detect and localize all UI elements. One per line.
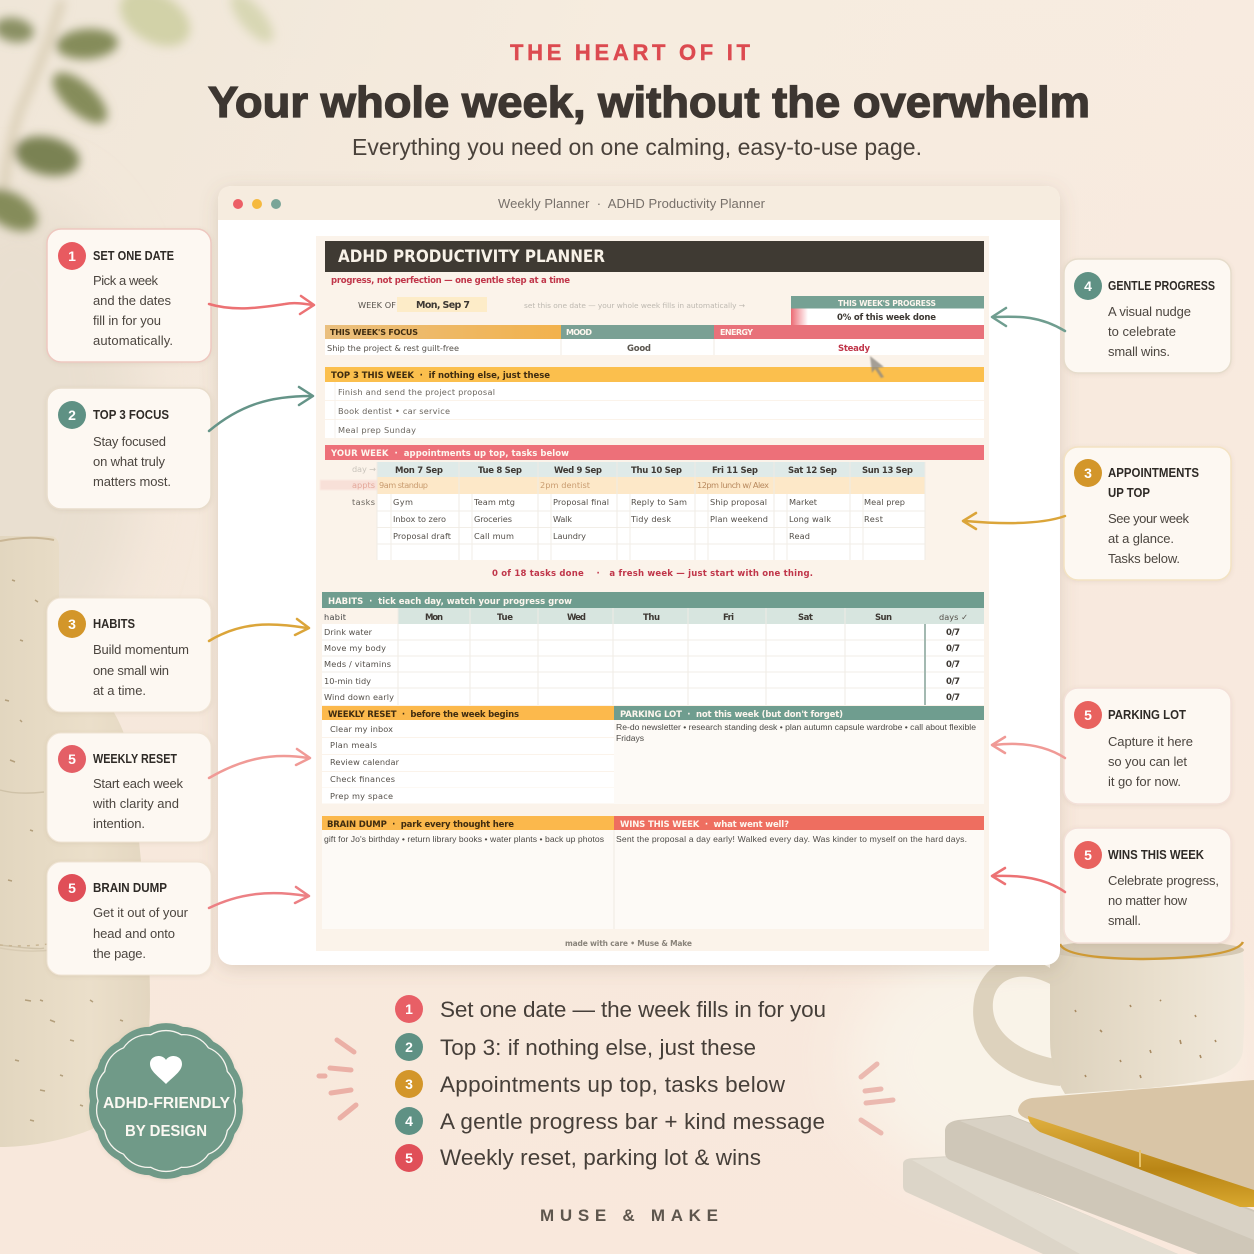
arrow: weekly reset xyxy=(209,749,310,778)
focus mood energy: MOOD xyxy=(566,328,592,337)
week grid: Sat 12 Sep xyxy=(788,466,837,476)
main title: Your whole week, without the overwhelm xyxy=(208,78,1090,127)
callout: top 3 focus: matters most. xyxy=(93,474,171,489)
callout: parking lot: PARKING LOT xyxy=(1108,708,1186,722)
your week xyxy=(320,445,984,579)
callout: appointments up top: Tasks below. xyxy=(1108,551,1180,566)
weekly reset: Clear my inbox xyxy=(330,724,393,734)
habits tracker: HABITS · tick each day, watch your progress grow xyxy=(328,597,572,607)
week grid xyxy=(320,462,925,560)
brain dump xyxy=(322,816,614,929)
week grid: Ship proposal xyxy=(710,497,767,507)
habits tracker xyxy=(322,592,984,705)
callout: weekly reset: WEEKLY RESET xyxy=(93,752,177,766)
callout: set one date: and the dates xyxy=(93,293,172,308)
week of date xyxy=(358,297,745,312)
badge: ADHD-friendly by design: BY DESIGN xyxy=(125,1123,207,1140)
brain dump: BRAIN DUMP · park every thought here xyxy=(327,820,514,830)
callout: brain dump: BRAIN DUMP xyxy=(93,881,167,895)
blurred plant shadow xyxy=(0,0,280,240)
callout: weekly reset: with clarity and xyxy=(92,796,179,811)
week grid: Meal prep xyxy=(864,497,905,507)
habits tracker: Move my body xyxy=(324,643,386,653)
arrow: top 3 focus xyxy=(209,387,313,431)
focus mood energy: Steady xyxy=(838,344,870,354)
habits tracker: Sun xyxy=(875,613,892,623)
callout: appointments up top: UP TOP xyxy=(1108,486,1150,500)
callout: wins this week: WINS THIS WEEK xyxy=(1108,848,1204,862)
window title bar: Weekly Planner · ADHD Productivity Planner xyxy=(498,196,766,211)
callout: habits xyxy=(47,598,211,712)
week grid: Fri 11 Sep xyxy=(712,466,758,476)
wins this week xyxy=(614,816,984,929)
week grid: Gym xyxy=(393,497,413,507)
habits tracker: Meds / vitamins xyxy=(324,659,391,669)
callout: set one date: fill in for you xyxy=(93,313,161,328)
callout: appointments up top: at a glance. xyxy=(1108,531,1174,546)
habits tracker: 0/7 xyxy=(946,660,960,670)
callout: wins this week: small. xyxy=(1108,913,1141,928)
summary list xyxy=(395,995,826,1172)
icon: cursor xyxy=(870,356,884,378)
callout: parking lot: Capture it here xyxy=(1108,734,1193,749)
wins this week: Sent the proposal a day early! Walked every day. Was kinder to myself on the hard days. xyxy=(616,834,967,844)
callout: top 3 focus: on what truly xyxy=(93,454,166,469)
progress box xyxy=(791,296,984,325)
planner title xyxy=(325,241,984,272)
week grid: 2pm dentist xyxy=(540,480,591,490)
week grid: Long walk xyxy=(789,514,831,524)
callout: appointments up top: See your week xyxy=(1108,511,1190,526)
callout: top 3 focus xyxy=(47,388,211,509)
arrow: parking lot xyxy=(992,737,1065,758)
week grid: 12pm lunch w/ Alex xyxy=(697,480,769,490)
week of date: WEEK OF xyxy=(358,300,396,310)
parking lot: PARKING LOT · not this week (but don't forget) xyxy=(620,710,843,720)
wins this week: WINS THIS WEEK · what went well? xyxy=(620,820,789,830)
callout: habits: HABITS xyxy=(93,617,135,631)
habits tracker: Fri xyxy=(723,613,734,623)
summary list: Appointments up top, tasks below xyxy=(440,1072,786,1097)
callout: set one date xyxy=(47,229,211,362)
week grid: Team mtg xyxy=(473,497,515,507)
habits tracker: 0/7 xyxy=(946,677,960,687)
summary list: Set one date — the week fills in for you xyxy=(440,997,826,1022)
callout: brain dump: the page. xyxy=(93,946,146,961)
callout: weekly reset: intention. xyxy=(93,816,145,831)
summary list: Top 3: if nothing else, just these xyxy=(440,1035,756,1060)
top 3 this week: TOP 3 THIS WEEK · if nothing else, just these xyxy=(331,371,550,381)
callout: appointments up top: APPOINTMENTS xyxy=(1108,466,1199,480)
ceramic vase xyxy=(0,536,150,1147)
top 3 this week: Book dentist • car service xyxy=(338,406,450,416)
arrow: appointments xyxy=(963,513,1065,529)
week grid: Inbox to zero xyxy=(393,514,446,524)
your week: 0 of 18 tasks done · a fresh week — just start with one thing. xyxy=(492,569,813,579)
week grid: 9am standup xyxy=(379,480,428,490)
callout: wins this week: no matter how xyxy=(1108,893,1188,908)
weekly reset: WEEKLY RESET · before the week begins xyxy=(328,710,519,720)
callout: gentle progress: GENTLE PROGRESS xyxy=(1108,279,1215,293)
progress box: THIS WEEK'S PROGRESS xyxy=(838,299,936,308)
window title bar xyxy=(218,186,1060,220)
summary list: 4 xyxy=(405,1113,413,1129)
week grid: Read xyxy=(789,531,810,541)
callout: gentle progress: 4 xyxy=(1084,278,1092,294)
sheet footer: made with care • Muse & Make xyxy=(565,939,692,948)
callout: top 3 focus: TOP 3 FOCUS xyxy=(93,408,169,422)
week grid: Market xyxy=(789,497,818,507)
callout: top 3 focus: Stay focused xyxy=(93,434,166,449)
habits tracker: Wed xyxy=(567,613,586,623)
week grid: Laundry xyxy=(553,531,586,541)
habits tracker: Tue xyxy=(497,613,513,623)
habits tracker: Thu xyxy=(643,613,660,623)
habits tracker: 10-min tidy xyxy=(324,676,371,686)
parking lot: Re-do newsletter • research standing desk • plan autumn capsule wardrobe • call about flexible xyxy=(616,722,976,732)
focus mood energy: THIS WEEK'S FOCUS xyxy=(330,328,418,337)
week grid: Rest xyxy=(864,514,884,524)
callout: set one date: SET ONE DATE xyxy=(93,249,174,263)
habits tracker: Sat xyxy=(798,613,813,623)
eyebrow heading: THE HEART OF IT xyxy=(510,40,751,65)
callout: set one date: 1 xyxy=(68,248,76,264)
badge: ADHD-friendly by design xyxy=(89,1023,243,1179)
week grid: Tue 8 Sep xyxy=(478,466,522,476)
habits tracker: Mon xyxy=(425,613,443,623)
callout: brain dump: Get it out of your xyxy=(93,905,189,920)
weekly reset: Check finances xyxy=(330,774,395,784)
coffee mug xyxy=(973,940,1244,1094)
top 3 this week xyxy=(325,367,984,438)
summary list: 1 xyxy=(405,1001,413,1017)
habits tracker: 0/7 xyxy=(946,628,960,638)
arrow: set one date xyxy=(209,296,314,314)
habits tracker: 0/7 xyxy=(946,644,960,654)
week grid: Call mum xyxy=(474,531,514,541)
callout: set one date: Pick a week xyxy=(93,273,158,288)
icon: heart xyxy=(150,1056,182,1084)
habits tracker: days ✓ xyxy=(939,612,968,622)
week of date: set this one date — your whole week fills in automatically → xyxy=(524,301,745,310)
callout: habits: one small win xyxy=(93,663,169,678)
habits tracker: Drink water xyxy=(324,627,373,637)
planner sheet xyxy=(316,236,989,951)
weekly reset: Prep my space xyxy=(330,791,393,801)
week grid: Sun 13 Sep xyxy=(862,466,913,476)
focus mood energy: Good xyxy=(627,344,651,354)
summary list: Weekly reset, parking lot & wins xyxy=(440,1145,761,1170)
callout: gentle progress: small wins. xyxy=(1108,344,1170,359)
habits tracker: Wind down early xyxy=(324,692,394,702)
summary list: A gentle progress bar + kind message xyxy=(440,1109,825,1134)
notebook stack and gold pen xyxy=(903,1080,1254,1254)
top 3 this week: Meal prep Sunday xyxy=(338,425,416,435)
week grid: Plan weekend xyxy=(710,514,768,524)
callout: wins this week xyxy=(1064,828,1231,943)
callout: brain dump xyxy=(47,862,211,975)
your week: YOUR WEEK · appointments up top, tasks below xyxy=(330,449,569,459)
progress box: 0% of this week done xyxy=(837,313,936,323)
callout: top 3 focus: 2 xyxy=(68,407,76,423)
week grid: Groceries xyxy=(474,514,512,524)
brain dump: gift for Jo's birthday • return library books • water plants • back up photos xyxy=(324,834,604,844)
week grid: Walk xyxy=(553,514,572,524)
week grid: Wed 9 Sep xyxy=(554,466,602,476)
callout: weekly reset: 5 xyxy=(68,751,76,767)
callout: parking lot: 5 xyxy=(1084,707,1092,723)
sparks right xyxy=(861,1064,893,1133)
browser window xyxy=(218,186,1060,965)
callout: gentle progress: A visual nudge xyxy=(1108,304,1191,319)
weekly reset xyxy=(322,706,614,804)
week grid: Tidy desk xyxy=(630,514,671,524)
week grid: Mon 7 Sep xyxy=(395,466,443,476)
week grid: Proposal final xyxy=(553,497,609,507)
weekly reset: Review calendar xyxy=(330,757,400,767)
arrow: brain dump xyxy=(209,887,309,908)
badge: ADHD-friendly by design: ADHD-FRIENDLY xyxy=(103,1095,230,1112)
subtitle: Everything you need on one calming, easy-to-use page. xyxy=(352,134,922,160)
summary list: 3 xyxy=(405,1076,413,1092)
focus mood energy: ENERGY xyxy=(720,328,753,337)
week grid: appts xyxy=(352,480,375,490)
parking lot: Fridays xyxy=(616,733,644,743)
brand name: MUSE & MAKE xyxy=(540,1206,718,1225)
summary list: 5 xyxy=(405,1150,413,1166)
callout: brain dump: head and onto xyxy=(93,926,175,941)
focus mood energy: Ship the project & rest guilt-free xyxy=(327,343,459,353)
callout: wins this week: Celebrate progress, xyxy=(1108,873,1219,888)
top 3 this week: Finish and send the project proposal xyxy=(338,387,495,397)
week grid: Proposal draft xyxy=(393,531,452,541)
callout: gentle progress xyxy=(1064,259,1231,373)
arrow: habits xyxy=(209,619,309,641)
callout: brain dump: 5 xyxy=(68,880,76,896)
week of date: Mon, Sep 7 xyxy=(416,300,470,311)
callout: appointments up top: 3 xyxy=(1084,465,1092,481)
arrow: wins xyxy=(992,868,1065,892)
week grid: day → xyxy=(352,464,376,474)
arrow: gentle progress xyxy=(992,308,1065,331)
callout: gentle progress: to celebrate xyxy=(1108,324,1176,339)
callout: parking lot: so you can let xyxy=(1108,754,1187,769)
week grid: Thu 10 Sep xyxy=(631,466,682,476)
callout: weekly reset: Start each week xyxy=(93,776,184,791)
weekly reset: Plan meals xyxy=(330,740,377,750)
week grid: tasks xyxy=(352,497,375,507)
week grid: Reply to Sam xyxy=(631,497,687,507)
focus mood energy xyxy=(325,325,984,355)
planner title: ADHD PRODUCTIVITY PLANNER xyxy=(338,247,605,266)
callout: appointments up top xyxy=(1064,447,1231,580)
tagline: progress, not perfection — one gentle step at a time xyxy=(331,276,570,286)
habits tracker: habit xyxy=(324,612,347,622)
habits tracker: 0/7 xyxy=(946,693,960,703)
callout: set one date: automatically. xyxy=(93,333,173,348)
sparks left xyxy=(319,1040,356,1118)
callout: parking lot: it go for now. xyxy=(1108,774,1181,789)
callout: habits: at a time. xyxy=(93,683,146,698)
summary list: 2 xyxy=(405,1039,413,1055)
callout: habits: 3 xyxy=(68,616,76,632)
callout: parking lot xyxy=(1064,688,1231,804)
callout: weekly reset xyxy=(47,733,211,842)
parking lot xyxy=(614,706,984,804)
callout: wins this week: 5 xyxy=(1084,847,1092,863)
callout: habits: Build momentum xyxy=(93,642,189,657)
